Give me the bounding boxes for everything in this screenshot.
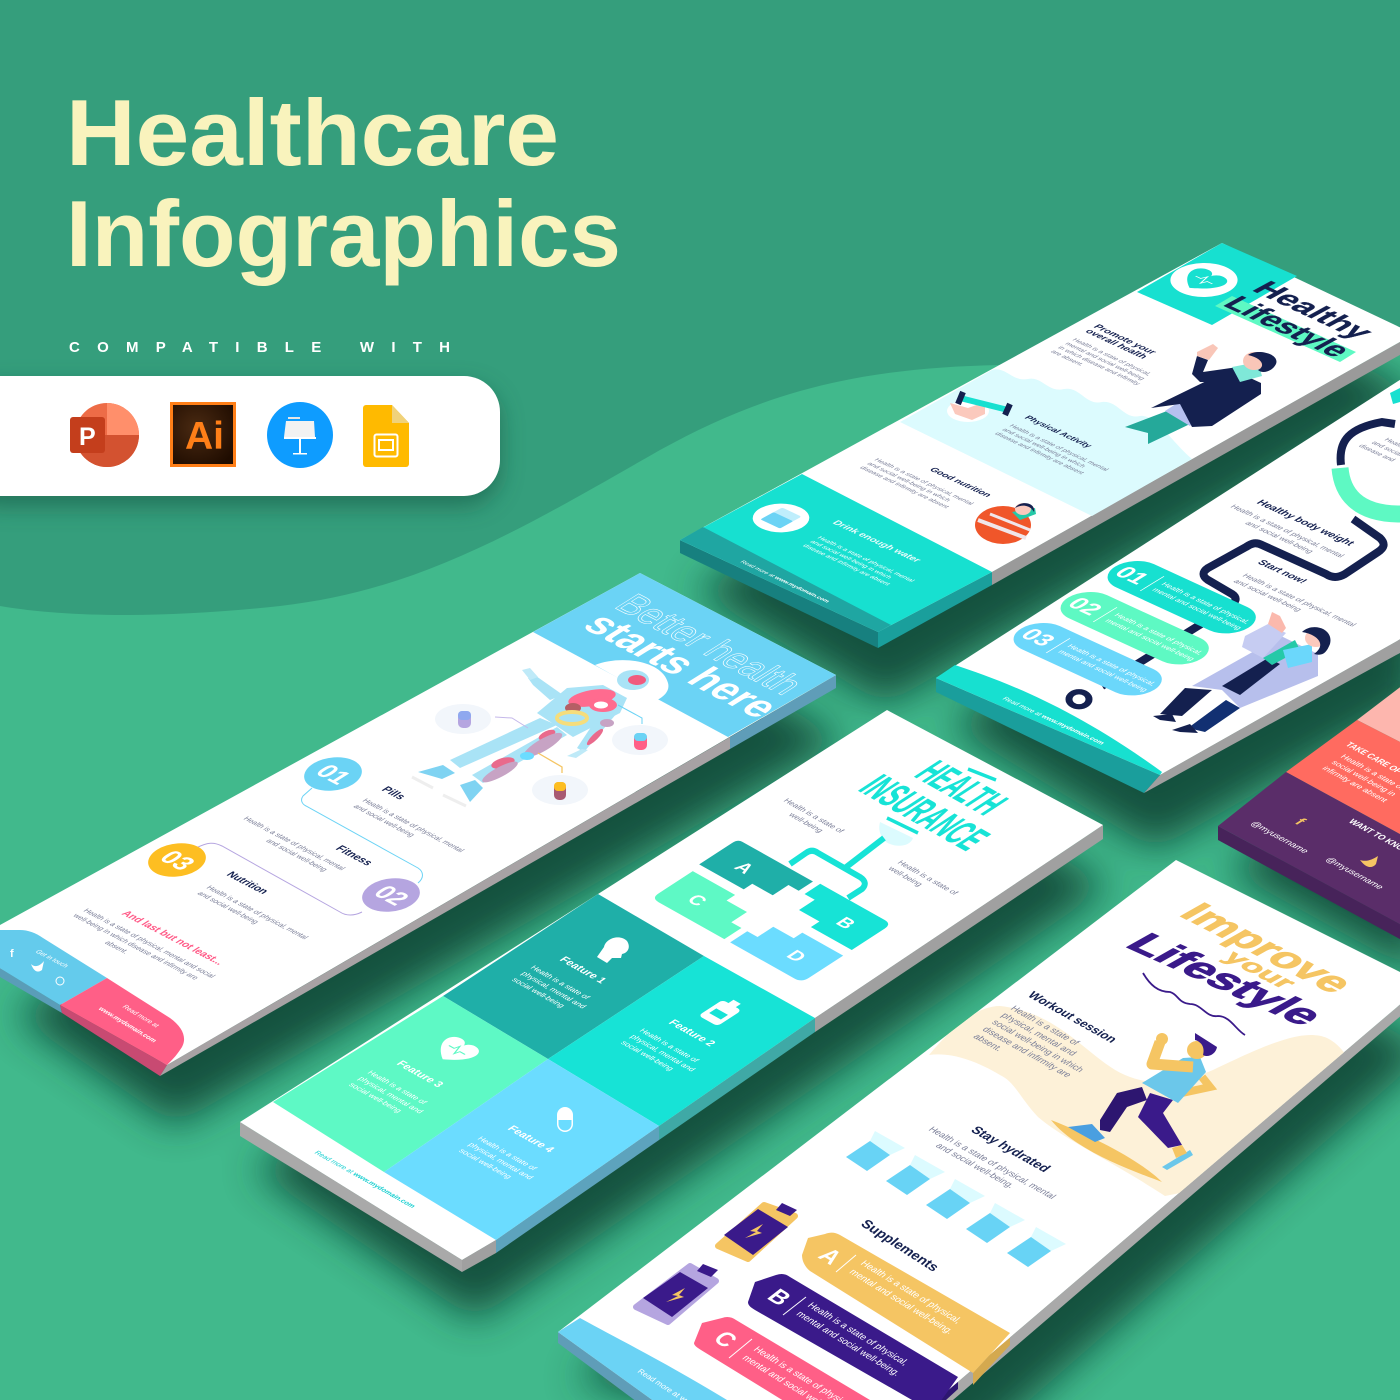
side paragraph: disease and xyxy=(1357,444,1397,463)
website text: www.mydomain.com xyxy=(95,1006,158,1044)
start now paragraph: Health is a state of physical, mental xyxy=(1240,572,1359,628)
closing heading: And last but not least... xyxy=(118,909,227,967)
closing paragraph: absent. xyxy=(103,939,131,955)
feature 2 text: Health is a state of xyxy=(637,1027,702,1064)
physical activity paragraph: and social well-being in which xyxy=(1000,428,1087,469)
get in touch: Get in touch xyxy=(33,949,70,969)
feature 4 text: social well-being xyxy=(457,1147,514,1180)
physical activity paragraph: disease and infirmity are absent xyxy=(993,432,1086,475)
footer pink xyxy=(60,978,184,1065)
title lifestyle: Lifestyle xyxy=(1116,927,1336,1031)
read more text: Read more at xyxy=(120,1004,160,1029)
title your: your xyxy=(1217,948,1301,993)
icon: bottle xyxy=(698,997,747,1026)
step 02 xyxy=(1049,586,1220,670)
arch behind figure xyxy=(595,660,668,700)
label C xyxy=(694,1317,880,1400)
workout paragraph: Health is a state of xyxy=(1008,1004,1082,1047)
social handle: @myusername xyxy=(1323,856,1386,891)
puzzle piece D xyxy=(730,915,843,983)
footer xyxy=(680,527,891,632)
coral paragraph: social well-being in xyxy=(1329,759,1399,798)
workout paragraph: disease and infirmity are xyxy=(980,1025,1074,1079)
feature 4 section xyxy=(384,1059,659,1240)
pills paragraph: Health is a state of physical, mental xyxy=(360,797,467,854)
label C: C xyxy=(708,1327,743,1352)
bottle lavender xyxy=(636,1264,718,1322)
feature 2 text: Feature 2 xyxy=(665,1018,718,1048)
icon: illustrator xyxy=(172,404,234,466)
compatible with label: COMPATIBLE WITH xyxy=(69,339,450,356)
physical activity paragraph: Health is a state of physical, mental xyxy=(1007,424,1110,472)
icon: dumbbell and arm xyxy=(947,392,1010,422)
step 03 badge: 03 xyxy=(153,847,201,875)
puzzle letters: D xyxy=(782,947,811,965)
feature 1 text: physical, mental and xyxy=(519,970,588,1010)
software panel xyxy=(0,376,500,506)
feature 3 text: physical, mental and xyxy=(356,1075,425,1115)
doctor illustration xyxy=(1125,344,1276,444)
panel: purple and coral card xyxy=(1218,672,1400,950)
title accent bars xyxy=(887,769,996,833)
icon: head xyxy=(597,937,629,963)
feature 1 text xyxy=(510,955,609,1016)
hydrated paragraph: and social well-being. xyxy=(934,1141,1017,1190)
step 01 xyxy=(1096,555,1267,639)
doctor illustration xyxy=(1153,612,1330,733)
feature 1 text: Feature 1 xyxy=(556,955,609,985)
title: Healthy xyxy=(1245,277,1382,343)
title: INSURANCE xyxy=(849,769,999,857)
step 01 badge: 01 xyxy=(309,761,357,789)
puzzle piece C xyxy=(651,871,766,939)
drink paragraph: and social well-being in which xyxy=(808,540,894,580)
funnel xyxy=(879,822,913,846)
title: Healthcare xyxy=(66,80,559,185)
promote text: Promote your xyxy=(1090,323,1159,356)
fitness text: Fitness xyxy=(332,844,375,868)
ground xyxy=(1051,1120,1162,1182)
drink paragraph: Health is a state of physical, mental xyxy=(815,536,916,583)
workout paragraph: physical, mental and xyxy=(999,1011,1079,1057)
step 03 badge xyxy=(136,836,218,884)
social handle: @myusername xyxy=(1248,820,1311,855)
puzzle letters: C xyxy=(683,891,712,909)
panel: stethoscope card xyxy=(936,367,1400,793)
icon: powerpoint: P xyxy=(79,423,96,451)
step 01 badge xyxy=(292,750,374,798)
body weight paragraph: Health is a state of physical, mental xyxy=(1228,503,1347,559)
good nutrition paragraph: Health is a state of physical, mental xyxy=(872,458,975,506)
pipe xyxy=(790,838,884,898)
puzzle letters: B xyxy=(831,914,861,932)
water glasses xyxy=(846,1131,1066,1267)
paragraph right: well-being xyxy=(885,865,925,888)
footer text: Read more at www.mydomain.com xyxy=(1000,696,1106,746)
puzzle letters: A xyxy=(730,859,759,877)
step 02 badge xyxy=(350,871,432,919)
feature 4 text xyxy=(457,1124,558,1187)
title xyxy=(849,755,1018,857)
drink water text: Drink enough water xyxy=(829,519,923,564)
puzzle letters xyxy=(681,858,861,965)
workout paragraph: social well-being in which xyxy=(990,1018,1086,1074)
header section xyxy=(533,573,836,737)
icon: apple person xyxy=(975,503,1036,544)
label A: mental and social well-being. xyxy=(846,1268,956,1336)
connector lines lavender xyxy=(196,843,362,915)
social icons: f xyxy=(10,948,14,960)
footer text: Read more at www.mydomain.com xyxy=(738,560,830,604)
icon: anatomy figure xyxy=(412,668,649,806)
nutrition text: Nutrition xyxy=(223,870,271,896)
step 02 badge: 02 xyxy=(367,882,415,910)
step 02: Health is a state of physical, xyxy=(1112,612,1205,656)
icon: google slides xyxy=(363,405,409,467)
promote text: overall health xyxy=(1082,328,1150,360)
icon: powerpoint xyxy=(70,403,139,467)
wave band xyxy=(900,369,1192,516)
title: Lifestyle xyxy=(1216,292,1359,361)
icon: keynote xyxy=(267,402,333,468)
paragraph left: Health is a state of xyxy=(781,797,847,835)
label B: Health is a state of physical, xyxy=(805,1301,911,1368)
panel: health insurance card xyxy=(240,710,1103,1272)
feature 1 text: Health is a state of xyxy=(528,964,593,1001)
icon: facebook: f xyxy=(1291,816,1309,828)
step 03: 03 xyxy=(1014,626,1060,650)
puzzle cross xyxy=(711,874,835,948)
feature 2 section xyxy=(548,956,815,1126)
puzzle piece A xyxy=(699,839,813,907)
puzzle xyxy=(649,838,892,983)
title xyxy=(66,80,621,286)
puzzle piece B xyxy=(780,884,892,950)
step 02: 02 xyxy=(1061,595,1107,619)
bottle yellow xyxy=(718,1203,797,1259)
title highlight xyxy=(1215,296,1356,362)
feature 1 text: social well-being xyxy=(510,976,567,1009)
stethoscope tube xyxy=(1102,422,1395,686)
title: HEALTH xyxy=(905,755,1018,822)
step 01: 01 xyxy=(1108,564,1154,588)
promote paragraph: mental and social well-being xyxy=(1063,342,1146,381)
workout paragraph: absent. xyxy=(971,1032,1005,1053)
label B: mental and social well-being. xyxy=(793,1310,903,1378)
feature 3 text: Health is a state of xyxy=(365,1069,430,1106)
promote paragraph: Health is a state of physical, xyxy=(1070,338,1153,377)
feature 2 text: physical, mental and xyxy=(628,1033,697,1073)
nutrition paragraph: and social well-being xyxy=(195,890,261,925)
good nutrition text: Good nutrition xyxy=(927,466,994,498)
promote paragraph: are absent. xyxy=(1049,350,1085,367)
icon: water badge xyxy=(741,498,821,538)
pill badge 2 xyxy=(612,725,668,755)
teal section xyxy=(680,474,992,632)
stethoscope ring xyxy=(1069,692,1089,707)
title: starts here xyxy=(573,606,791,724)
step 01: mental and social well-being xyxy=(1150,587,1244,631)
hydrated paragraph: Health is a state of physical, mental xyxy=(926,1125,1058,1201)
pills text: Pills xyxy=(378,785,408,802)
promote paragraph: in which disease and infirmity xyxy=(1056,346,1142,387)
icon: twitter xyxy=(1360,856,1378,867)
feature 2 text xyxy=(619,1018,718,1079)
feature 3 text xyxy=(347,1059,446,1121)
body weight paragraph: and social well-being xyxy=(1243,520,1316,554)
feature 2 text: social well-being xyxy=(619,1039,676,1072)
supplements heading: Supplements xyxy=(858,1216,943,1274)
stethoscope chest piece xyxy=(1340,468,1400,514)
footer blue xyxy=(0,930,107,1005)
label B xyxy=(748,1274,958,1400)
paragraph right: Health is a state of xyxy=(895,859,961,897)
feature 4 text: Health is a state of xyxy=(475,1135,540,1172)
title glimpse xyxy=(1390,388,1400,404)
hills xyxy=(929,1006,1346,1196)
icon: capsule xyxy=(557,1107,573,1132)
hydrated heading: Stay hydrated xyxy=(968,1124,1054,1174)
outlined title: Better health xyxy=(605,589,813,701)
icon: illustrator: Ai xyxy=(185,415,224,458)
step 03 xyxy=(1002,617,1173,701)
label A: A xyxy=(813,1244,848,1269)
step 03: Health is a state of physical, xyxy=(1065,643,1158,687)
wavy line xyxy=(1143,973,1245,1035)
workout heading: Workout session xyxy=(1025,989,1120,1045)
step 02: mental and social well-being xyxy=(1103,618,1197,662)
nutrition paragraph: Health is a state of physical, mental xyxy=(204,884,311,941)
icon: heart badge xyxy=(1157,256,1251,304)
connector lines xyxy=(302,788,422,883)
title: Infographics xyxy=(66,181,621,286)
good nutrition paragraph: and social well-being in which xyxy=(865,462,952,503)
icon: heart xyxy=(428,1034,483,1068)
pill badge 3 xyxy=(532,775,588,805)
healthy body weight text: Healthy body weight xyxy=(1253,498,1358,548)
coral paragraph: infirmity are absent xyxy=(1320,765,1390,804)
footer xyxy=(558,1318,727,1400)
social icons xyxy=(10,948,64,985)
pill badge 1 xyxy=(435,704,491,734)
footer section xyxy=(936,665,1162,775)
feature 3 section xyxy=(273,996,548,1172)
drink paragraph: disease and infirmity are absent xyxy=(801,544,892,587)
footer text: Read more at www.mydomain.com xyxy=(312,1150,416,1209)
start now text: Start now! xyxy=(1254,559,1309,585)
label B: B xyxy=(762,1285,797,1310)
panel: improve your lifestyle card xyxy=(558,860,1400,1400)
title improve: Improve xyxy=(1170,898,1363,999)
fitness paragraph: and social well-being xyxy=(264,837,330,873)
feature 1 section xyxy=(443,894,704,1059)
step 01: Health is a state of physical, xyxy=(1159,581,1252,625)
closing paragraph: well-being in which disease and infirmity are xyxy=(70,912,201,981)
step 03: mental and social well-being xyxy=(1056,649,1150,693)
header block xyxy=(1137,243,1297,325)
good nutrition paragraph: disease and infirmity are absent xyxy=(858,466,951,509)
paragraph left: well-being xyxy=(786,811,825,834)
label A: Health is a state of physical, xyxy=(858,1259,964,1326)
feature 4 text: Feature 4 xyxy=(504,1124,558,1155)
closing paragraph: Health is a state of physical, mental and social xyxy=(81,907,218,979)
background wave xyxy=(0,0,1400,615)
panel: healthy lifestyle card xyxy=(680,243,1400,648)
feature 4 text: physical, mental and xyxy=(466,1141,535,1181)
runner illustration xyxy=(1068,1033,1217,1170)
pills paragraph: and social well-being xyxy=(351,803,417,838)
start now paragraph: and social well-being xyxy=(1231,578,1304,613)
fitness paragraph: Health is a state of physical, mental xyxy=(241,815,348,872)
card shadows xyxy=(15,300,1400,1400)
feature 3 text: social well-being xyxy=(347,1081,404,1114)
physical activity text: Physical Activity xyxy=(1022,414,1095,449)
label A xyxy=(802,1233,1010,1373)
feature 3 text: Feature 3 xyxy=(393,1059,446,1089)
panel: better health card xyxy=(0,573,836,1076)
